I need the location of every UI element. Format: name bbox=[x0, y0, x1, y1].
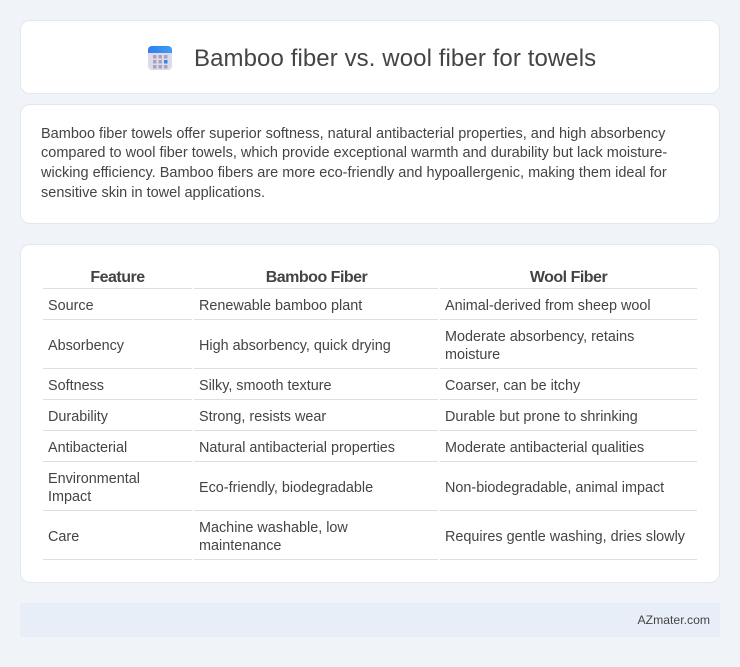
panel: summary card bbox=[20, 104, 720, 224]
row: antibacterial bbox=[48, 440, 644, 456]
table header: Feature bbox=[90, 269, 145, 286]
row: absorbency bbox=[48, 329, 634, 363]
table header: Bamboo Fiber bbox=[266, 269, 367, 286]
row: softness: Coarser, can be itchy bbox=[445, 378, 580, 394]
row: source bbox=[48, 298, 651, 314]
row: care: Machine washable, low bbox=[199, 520, 348, 536]
row: antibacterial: Natural antibacterial properties bbox=[199, 440, 395, 456]
panel: comparison table card bbox=[20, 244, 720, 583]
row: absorbency: High absorbency, quick drying bbox=[199, 338, 391, 354]
row: environmental impact: Impact bbox=[48, 489, 91, 505]
row: care: Care bbox=[48, 529, 79, 545]
row: environmental impact: Eco-friendly, biodegradable bbox=[199, 480, 373, 496]
row: durability: Durability bbox=[48, 409, 108, 425]
row: durability: Durable but prone to shrinking bbox=[445, 409, 638, 425]
row: source: Animal-derived from sheep wool bbox=[445, 298, 651, 314]
comparison table bbox=[43, 269, 697, 560]
row: environmental impact: Environmental bbox=[48, 471, 140, 487]
row: antibacterial: Antibacterial bbox=[48, 440, 127, 456]
row: softness: Silky, smooth texture bbox=[199, 378, 332, 394]
footer bar bbox=[20, 603, 720, 637]
summary text: sensitive skin in towel applications. bbox=[41, 185, 265, 201]
row: care bbox=[48, 520, 685, 554]
row: environmental impact bbox=[48, 471, 664, 505]
table header bbox=[90, 269, 608, 286]
row: antibacterial: Moderate antibacterial qualities bbox=[445, 440, 644, 456]
row: softness: Softness bbox=[48, 378, 104, 394]
row: durability bbox=[48, 409, 638, 425]
table header: Wool Fiber bbox=[530, 269, 607, 286]
row: environmental impact: Non-biodegradable, animal impact bbox=[445, 480, 664, 496]
title: Bamboo fiber vs. wool fiber for towels bbox=[194, 45, 596, 72]
icon: calendar bbox=[148, 46, 172, 70]
row: absorbency: Moderate absorbency, retains bbox=[445, 329, 634, 345]
row: care: maintenance bbox=[199, 538, 281, 554]
summary text: compared to wool fiber towels, which provide exceptional warmth and durability but lack moisture- bbox=[41, 145, 667, 161]
summary text: wicking efficiency. Bamboo fibers are more eco-friendly and hypoallergenic, making them ideal for bbox=[41, 165, 667, 181]
footer credit: AZmater.com bbox=[638, 613, 710, 627]
row: durability: Strong, resists wear bbox=[199, 409, 326, 425]
row: care: Requires gentle washing, dries slowly bbox=[445, 529, 685, 545]
panel: title card bbox=[20, 20, 720, 94]
row: absorbency: moisture bbox=[445, 347, 500, 363]
row: softness bbox=[48, 378, 580, 394]
row: source: Renewable bamboo plant bbox=[199, 298, 362, 314]
summary text: Bamboo fiber towels offer superior softness, natural antibacterial properties, and high absorbency bbox=[41, 126, 665, 142]
summary text bbox=[41, 126, 667, 201]
row: source: Source bbox=[48, 298, 94, 314]
row: absorbency: Absorbency bbox=[48, 338, 124, 354]
